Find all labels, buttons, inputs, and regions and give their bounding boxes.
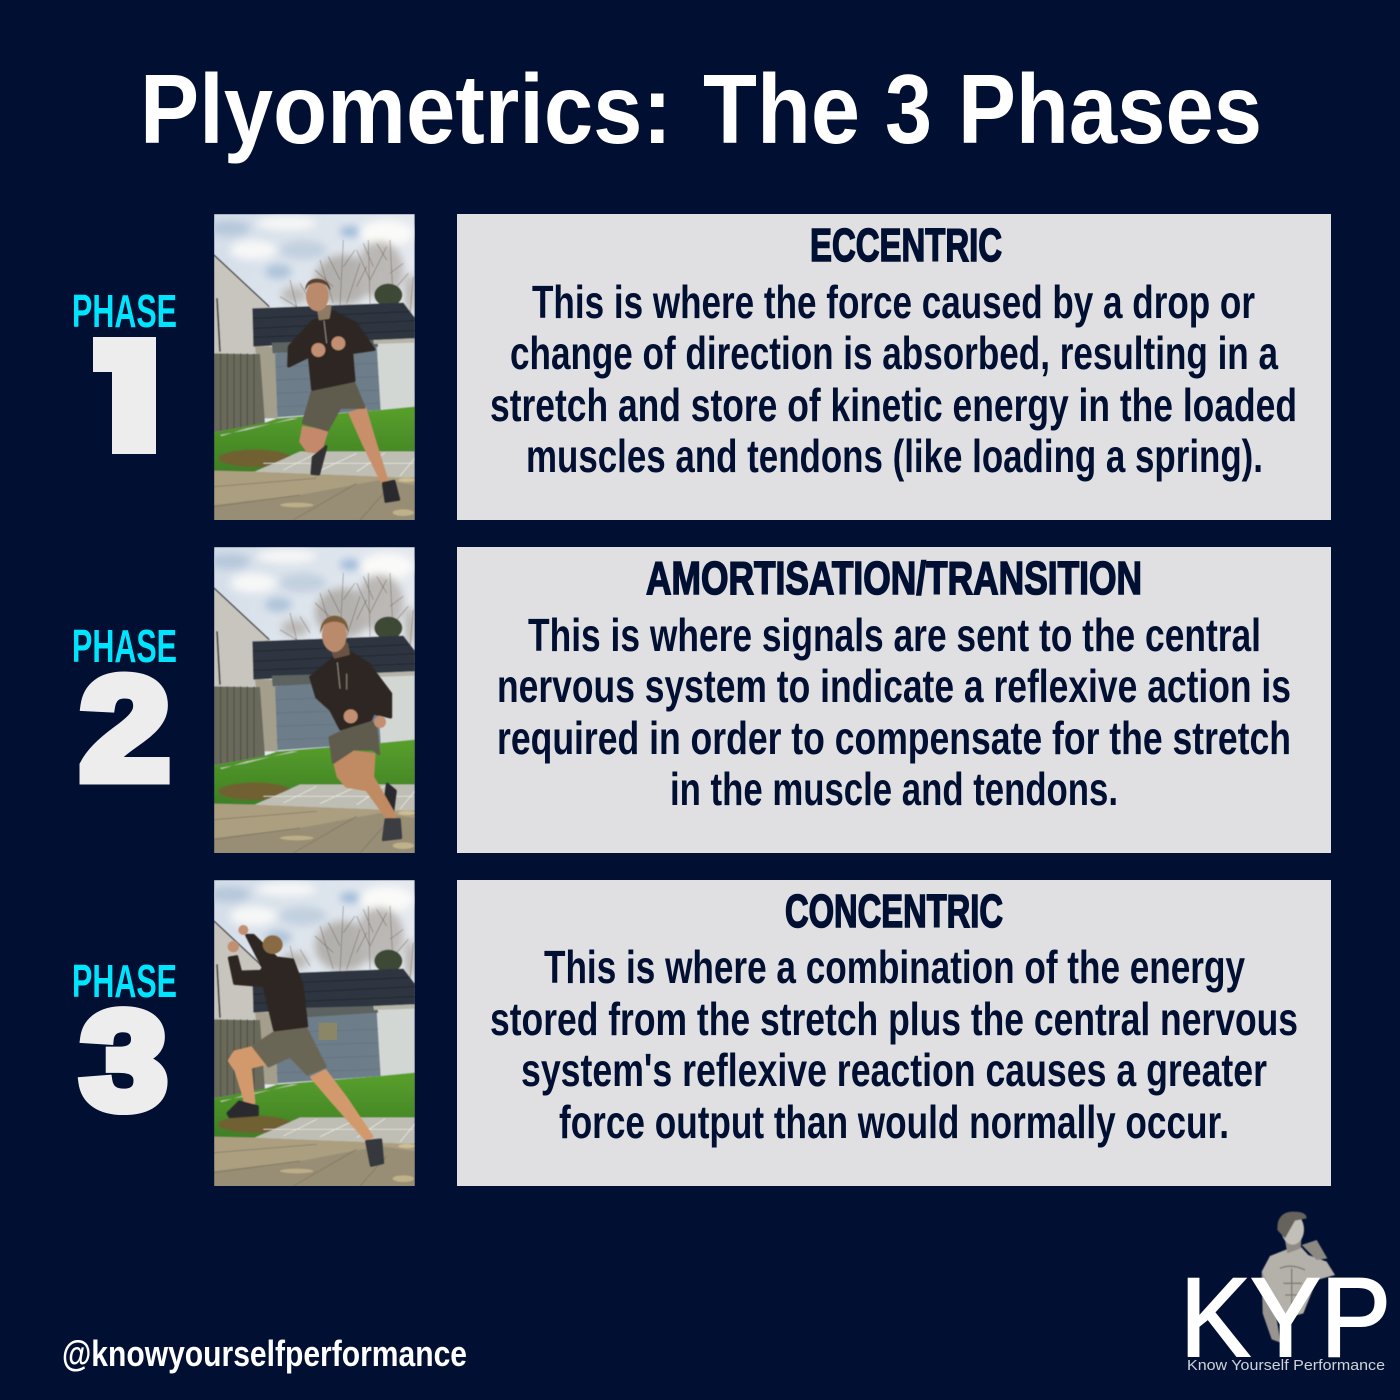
phase 2 label bbox=[72, 620, 177, 810]
phase 2 numeral: 2 bbox=[80, 647, 170, 810]
title: Plyometrics: bbox=[140, 54, 672, 164]
phase 2 photo: athlete in transition bbox=[210, 547, 415, 854]
phase 1 photo: athlete landing bbox=[210, 214, 415, 521]
KYP letters: KYP bbox=[1180, 1255, 1391, 1380]
phase 1 numeral bbox=[93, 337, 156, 454]
icon: David statue bbox=[1262, 1212, 1335, 1343]
phase 1 word: PHASE bbox=[72, 285, 177, 337]
athlete bbox=[289, 279, 399, 501]
phase 2 word: PHASE bbox=[72, 620, 177, 672]
body: concentric bbox=[490, 941, 1298, 1148]
shed window bbox=[319, 1023, 337, 1040]
title: 3 bbox=[885, 54, 932, 164]
athlete bbox=[228, 925, 383, 1165]
phase 3 numeral: 3 bbox=[81, 984, 167, 1138]
panel: amortisation bbox=[457, 547, 1331, 853]
social handle: @knowyourselfperformance bbox=[62, 1333, 467, 1374]
phase 3 photo: athlete jumping bbox=[210, 880, 415, 1187]
phase 1 label bbox=[74, 294, 176, 454]
title bbox=[140, 54, 1262, 164]
panel: eccentric bbox=[457, 214, 1331, 520]
phase 3 word: PHASE bbox=[72, 955, 177, 1007]
heading: eccentric: ECCENTRIC bbox=[810, 219, 1002, 271]
body: amortisation bbox=[497, 609, 1291, 815]
heading: concentric: CONCENTRIC bbox=[785, 885, 1003, 937]
heading: amortisation/transition: AMORTISATION/TRANSITION bbox=[646, 552, 1142, 604]
phase 1 numeral: 1 bbox=[78, 311, 162, 485]
title: The bbox=[703, 54, 860, 164]
phase 3 label bbox=[72, 955, 177, 1138]
title: Phases bbox=[958, 54, 1262, 164]
body: eccentric bbox=[490, 276, 1297, 482]
body: amortisation: in the muscle and tendons. bbox=[670, 763, 1118, 815]
logo: KYP bbox=[1180, 1212, 1391, 1380]
panel: concentric bbox=[457, 880, 1331, 1186]
athlete bbox=[311, 616, 401, 840]
tagline: Know Yourself Performance bbox=[1187, 1358, 1385, 1374]
